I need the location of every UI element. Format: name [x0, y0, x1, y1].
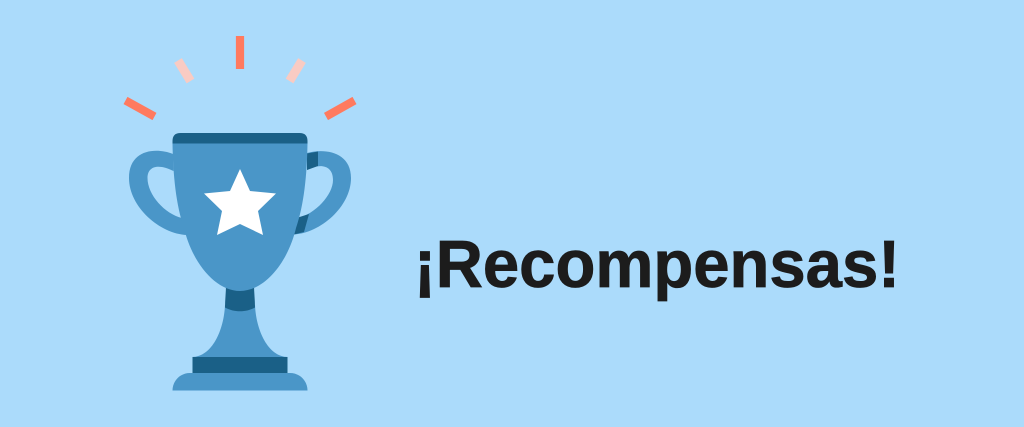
ray: far left — [126, 100, 154, 116]
trophy cup body — [172, 143, 308, 291]
ray: inner right — [290, 60, 302, 81]
trophy right handle — [294, 151, 351, 234]
icon: sparkle rays above trophy — [126, 36, 354, 116]
cup dark rim — [172, 133, 308, 144]
ray: inner left — [178, 60, 190, 81]
star — [204, 169, 276, 235]
trophy stem — [192, 305, 288, 357]
right handle dark band bottom — [294, 214, 309, 234]
trophy left handle — [129, 151, 187, 235]
heading: ¡Recompensas! — [414, 227, 900, 302]
base dark plinth — [192, 357, 288, 374]
stem dark collar — [225, 285, 255, 311]
ray: far right — [326, 100, 354, 116]
icon: trophy — [129, 133, 351, 390]
right handle dark band top — [307, 152, 318, 170]
base foot — [172, 373, 308, 390]
ray: centre — [236, 36, 244, 69]
